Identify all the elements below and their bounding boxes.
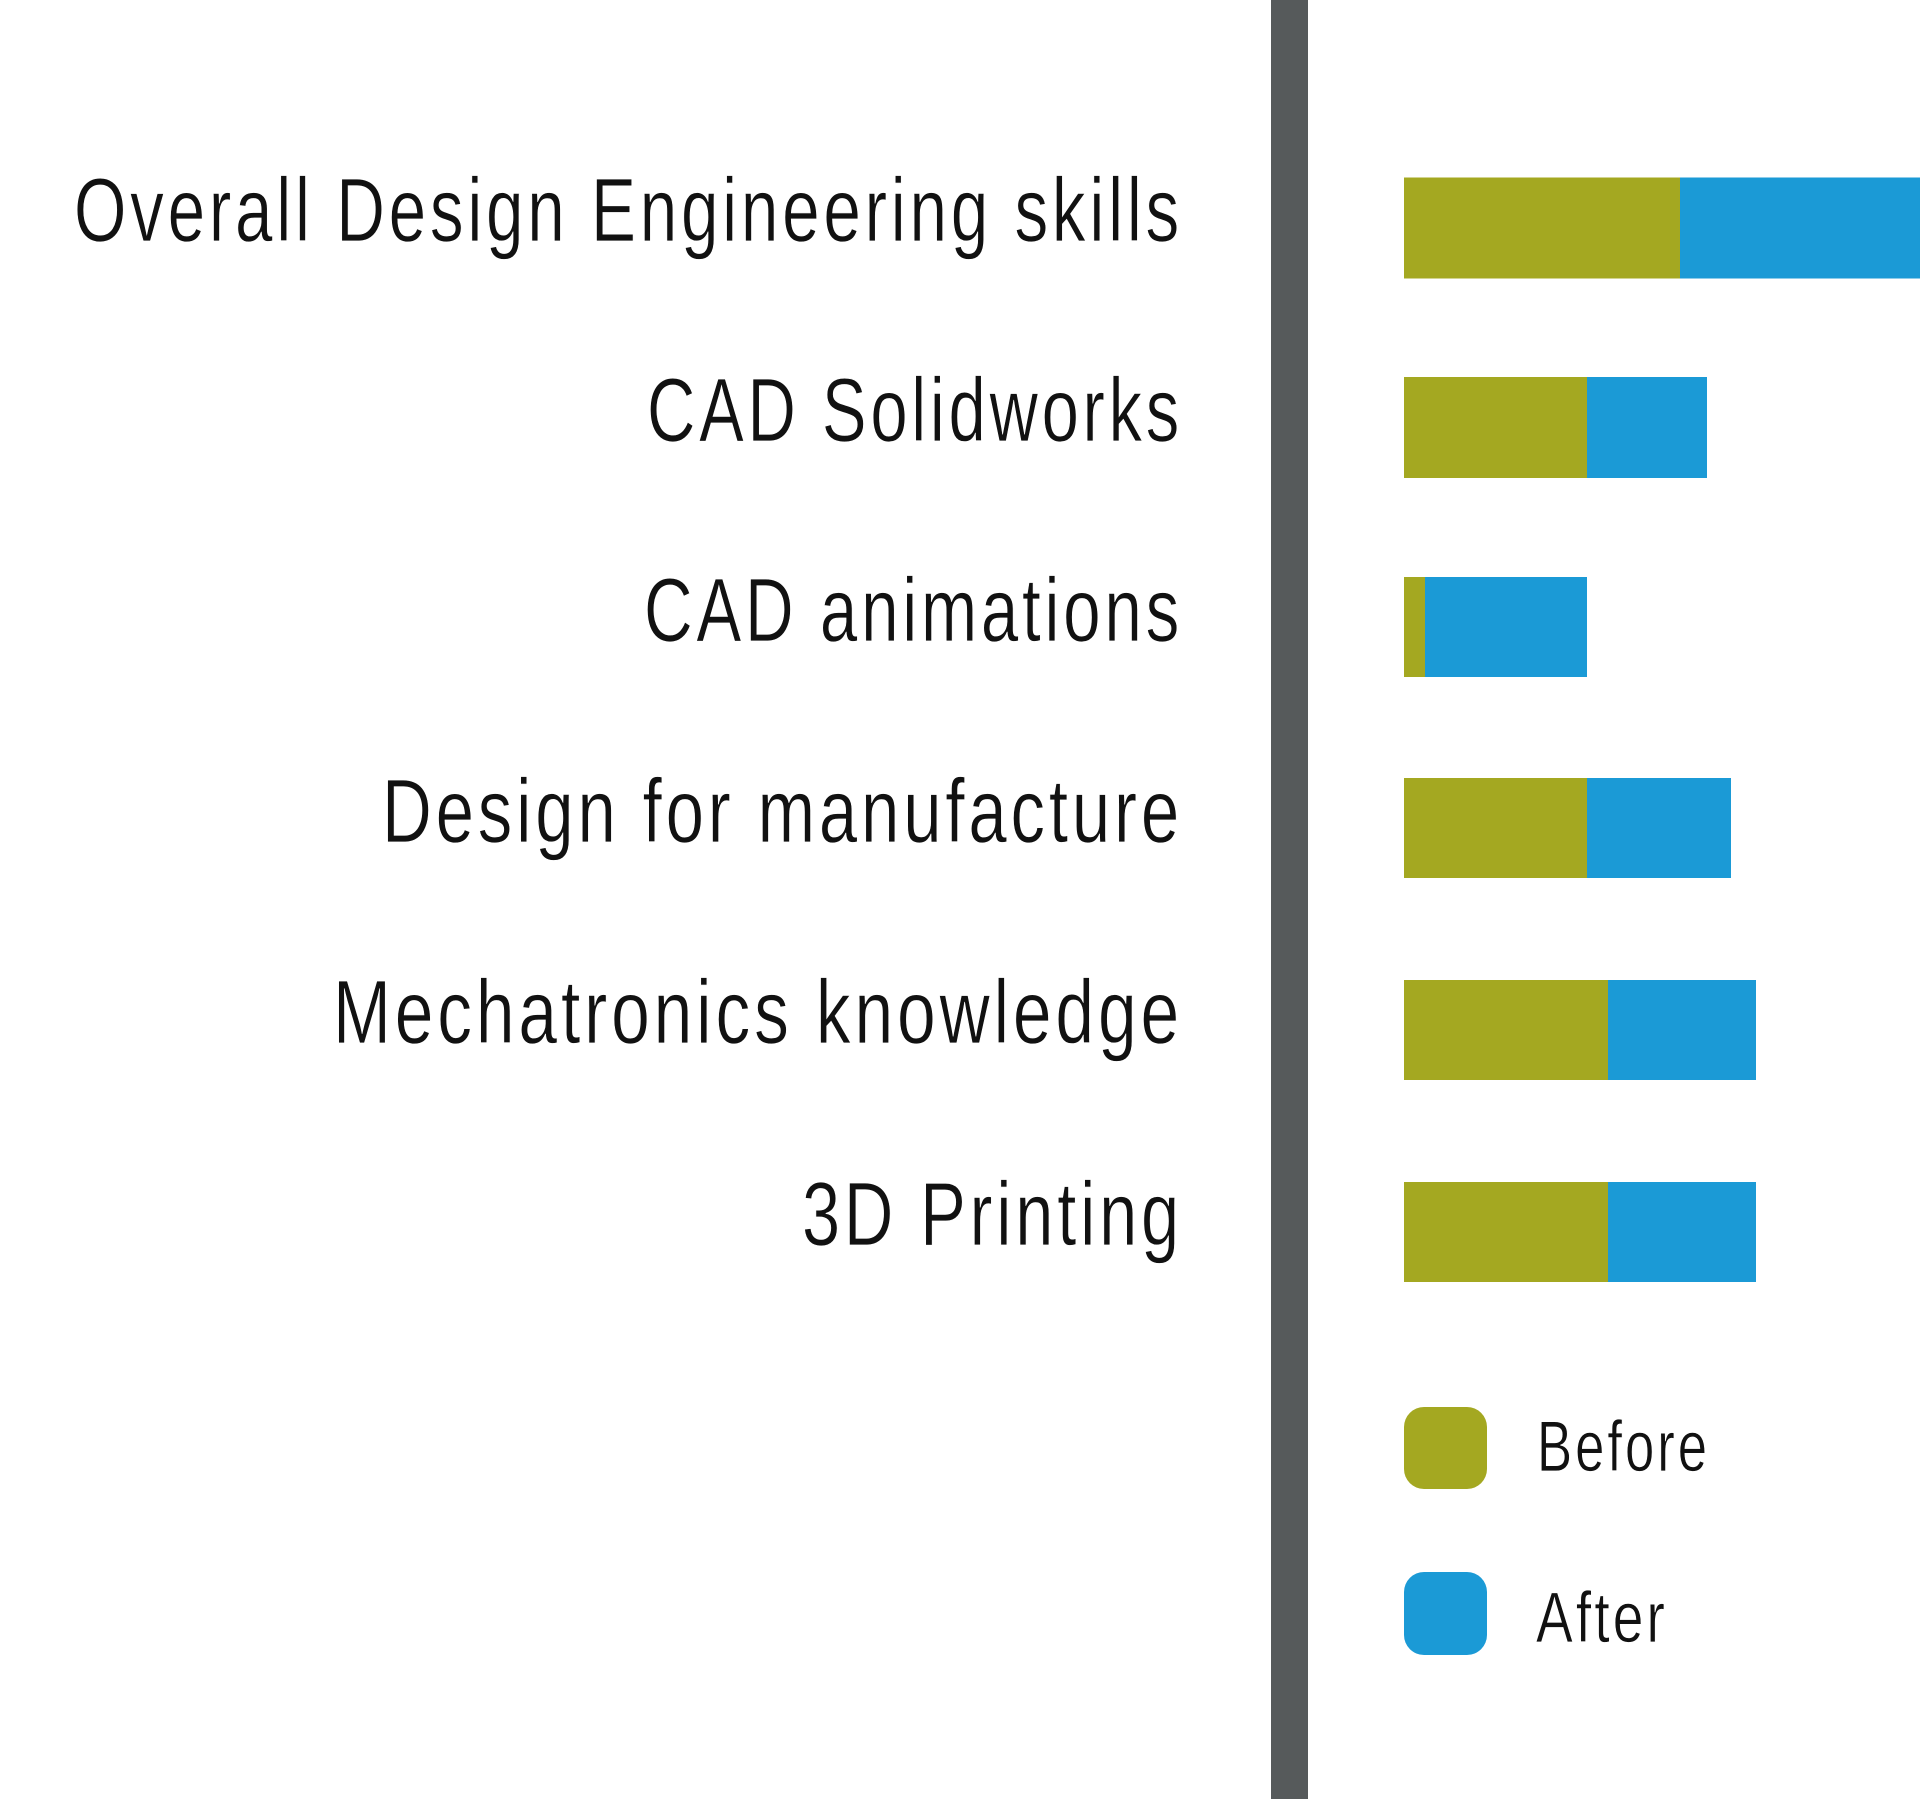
legend swatch: before bbox=[1404, 1407, 1487, 1489]
label: Design for manufacture: Design for manufacture bbox=[382, 762, 1183, 862]
bar: Overall Design Engineering skills bbox=[1404, 178, 1920, 278]
legend swatch: after bbox=[1404, 1572, 1487, 1655]
label: 3D Printing: 3D Printing bbox=[802, 1165, 1183, 1265]
label: CAD Solidworks: CAD Solidworks bbox=[647, 361, 1183, 461]
skill labels bbox=[74, 161, 1183, 1265]
legend bbox=[1404, 1407, 1710, 1658]
bar: Mechatronics knowledge bbox=[1404, 980, 1756, 1080]
legend label: before: Before bbox=[1537, 1408, 1710, 1487]
label: Mechatronics knowledge: Mechatronics knowledge bbox=[333, 963, 1183, 1063]
bar: CAD animations bbox=[1404, 577, 1587, 677]
label: CAD animations: CAD animations bbox=[644, 561, 1183, 661]
legend label: after: After bbox=[1536, 1579, 1668, 1658]
vertical divider bbox=[1271, 0, 1308, 1799]
stacked bar chart bbox=[1404, 178, 1920, 1282]
label: Overall Design Engineering skills: Overall Design Engineering skills bbox=[74, 161, 1183, 261]
bar: CAD Solidworks bbox=[1404, 377, 1707, 478]
bar: 3D Printing bbox=[1404, 1182, 1756, 1282]
bar: Design for manufacture bbox=[1404, 778, 1731, 878]
